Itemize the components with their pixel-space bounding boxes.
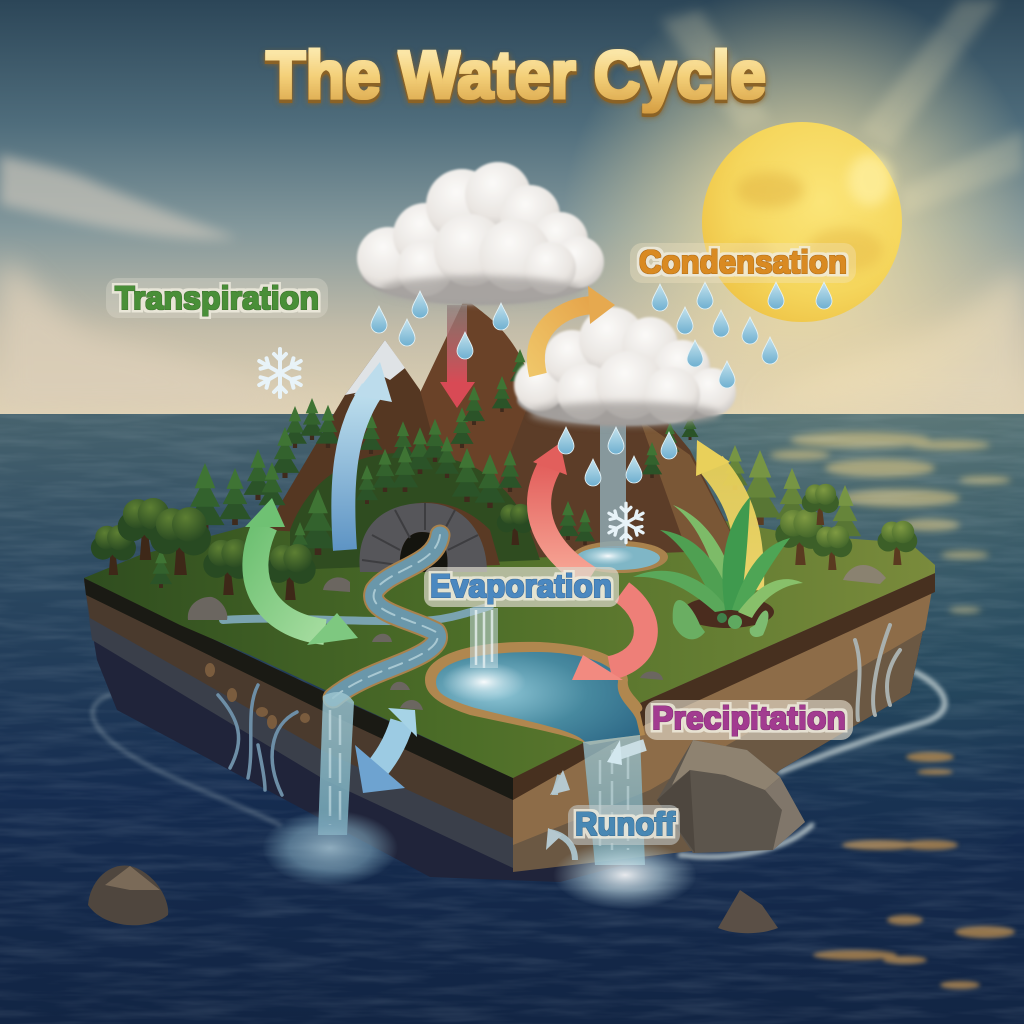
round trees [91, 484, 917, 600]
red arrow upper [533, 443, 590, 578]
sun rays [660, 0, 1024, 215]
ocean foam around island [93, 672, 945, 857]
label: transpiration: Transpiration [115, 280, 319, 316]
upper waterfall [442, 608, 526, 702]
orange arc arrow [536, 286, 615, 375]
island soil side [84, 573, 935, 882]
snowflake left [256, 349, 304, 397]
grass surface [84, 520, 935, 778]
ocean rock right [718, 890, 778, 933]
plant [633, 497, 803, 639]
label: runoff: Runoff [575, 806, 675, 842]
red arrow lower [572, 592, 646, 680]
blue double arrow [355, 708, 417, 793]
ocean rock left [88, 865, 168, 925]
foreground waterfall left [318, 692, 354, 835]
sky background [0, 0, 1024, 414]
label: condensation: Condensation [639, 244, 847, 280]
cloud one [357, 162, 604, 305]
pine forest [150, 349, 861, 588]
splash left [262, 810, 398, 886]
green arrow [245, 498, 358, 645]
ocean [0, 414, 1024, 1024]
blue rising arrow [343, 362, 392, 550]
stone tunnel [359, 503, 487, 572]
underground pebbles left [205, 663, 310, 729]
small pool [572, 541, 668, 573]
waterfall from cloud [600, 420, 626, 548]
streams [223, 535, 490, 698]
red down arrow [440, 305, 475, 408]
sun reflection on ocean [672, 414, 1024, 992]
splash right [553, 841, 697, 909]
underground roots right [855, 625, 900, 720]
sun glow [578, 0, 1024, 399]
title: The Water Cycle [266, 37, 766, 113]
main pool [425, 642, 645, 745]
mountains [265, 298, 745, 570]
sun [702, 122, 902, 322]
label: evaporation: Evaporation [430, 568, 612, 604]
snowflake right [606, 503, 646, 543]
runoff small arrows [550, 775, 575, 860]
big rock [657, 740, 805, 853]
underground roots left [218, 685, 297, 795]
rocks on grass [188, 565, 886, 710]
cloud two [514, 307, 736, 426]
raindrops [371, 282, 832, 486]
background clouds [0, 155, 1024, 412]
label: precipitation: Precipitation [652, 700, 846, 736]
ocean wave texture [0, 414, 1024, 1024]
yellow arrow [696, 440, 750, 590]
foreground waterfall right [583, 735, 645, 865]
pale arrow to waterfall [607, 740, 645, 765]
runoff arrow heads [546, 770, 570, 850]
